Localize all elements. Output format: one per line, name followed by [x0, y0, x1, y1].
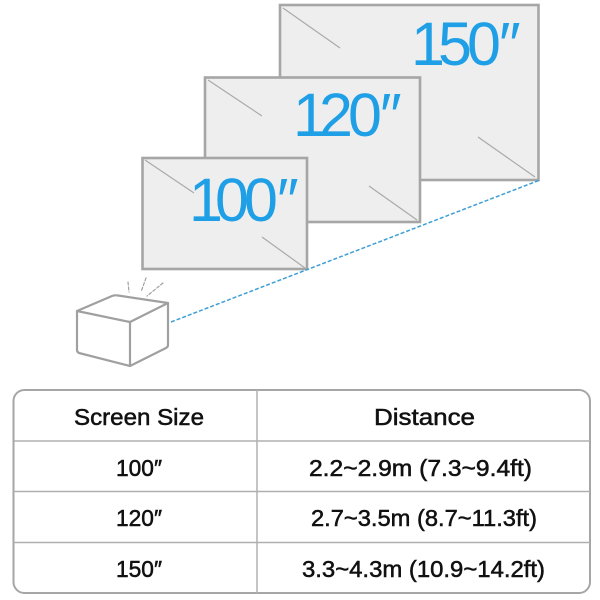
screen: 100 inch: [142, 158, 307, 269]
label: 150 inch: 150″: [411, 10, 521, 78]
table: [14, 390, 590, 593]
projection dashed line: [171, 180, 540, 322]
header: Screen Size: Screen Size: [74, 404, 204, 430]
row 120 distance: 2.7~3.5m (8.7~11.3ft): [311, 505, 537, 531]
label: 120 inch: 120″: [293, 81, 402, 149]
screen: 120 inch: [205, 78, 420, 222]
icon: light rays: [128, 278, 163, 296]
screen: 150 inch: [280, 5, 538, 180]
label: 100 inch: 100″: [189, 166, 299, 234]
row 100 distance: 2.2~2.9m (7.3~9.4ft): [309, 455, 532, 481]
row 150 size: 150″: [116, 556, 162, 582]
row 150 distance: 3.3~4.3m (10.9~14.2ft): [302, 556, 545, 582]
header: Distance: Distance: [374, 404, 475, 430]
row 120 size: 120″: [116, 505, 162, 531]
icon: projector box: [77, 278, 168, 366]
row 100 size: 100″: [116, 455, 162, 481]
